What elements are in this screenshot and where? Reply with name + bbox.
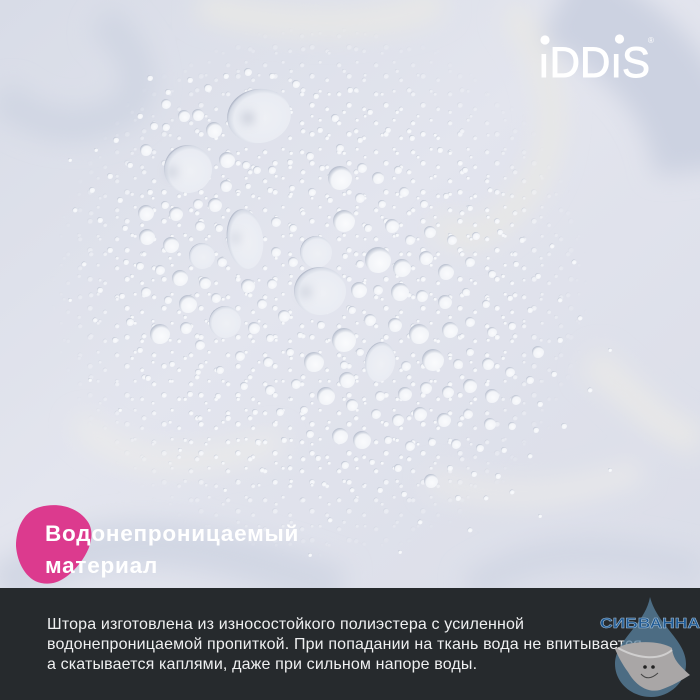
pink blob	[16, 505, 91, 584]
dark text panel	[0, 588, 700, 700]
heading	[45, 521, 299, 578]
heading: Водонепроницаемый	[45, 521, 299, 546]
small droplets	[68, 68, 612, 557]
body text: водонепроницаемой пропиткой. При попадании на ткань вода не впитывается,	[47, 636, 647, 653]
watermark: СИБВАННА: СИБВАННА	[600, 615, 700, 632]
large droplets	[164, 84, 398, 384]
body text	[47, 616, 647, 673]
body text: а скатывается каплями, даже при сильном напоре воды.	[47, 656, 477, 673]
logo: IDDIS: ıDDıS	[538, 39, 650, 87]
body text: Штора изготовлена из износостойкого полиэстера с усиленной	[47, 616, 524, 633]
logo: IDDIS: ®	[648, 36, 654, 45]
heading: материал	[45, 553, 158, 578]
droplet texture	[77, 45, 568, 530]
